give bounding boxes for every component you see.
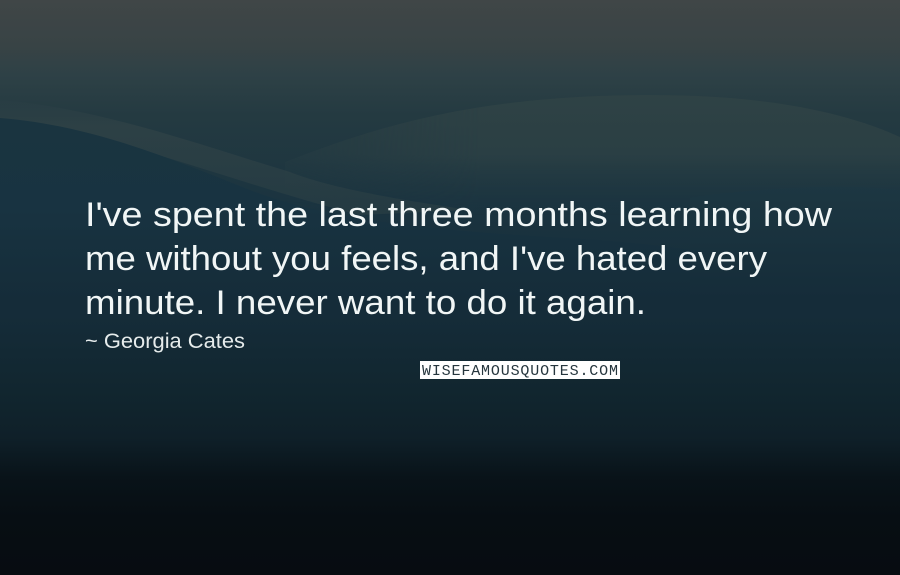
author attribution: ~ Georgia Cates [85,330,245,353]
background wave: right dark hill [690,187,900,316]
quote line 1: I've spent the last three months learning how [85,196,832,234]
background wave: dark left hill [0,118,900,316]
quote line 2: me without you feels, and I've hated every [85,240,767,278]
background wave: light band above left hill [0,100,470,215]
quote text [85,196,832,322]
quote line 3: minute. I never want to do it again. [85,284,646,322]
background wave: right crest [414,108,900,162]
watermark badge: WISEFAMOUSQUOTES.COM [422,363,618,380]
